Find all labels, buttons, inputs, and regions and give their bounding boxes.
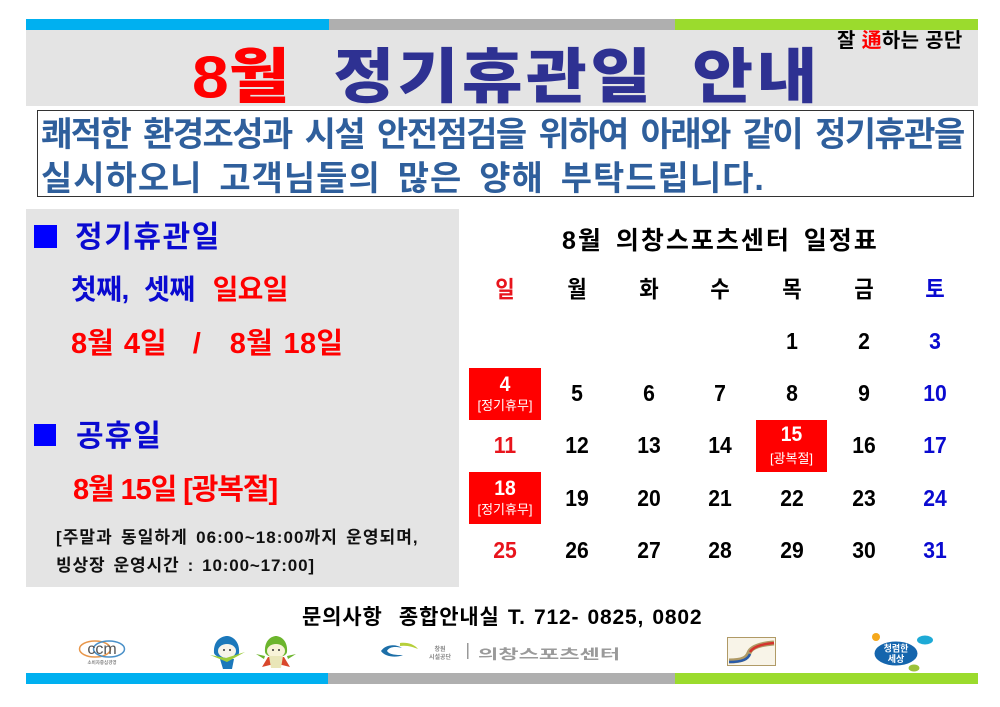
row 4: 21	[708, 485, 732, 511]
weekday header row	[495, 276, 945, 302]
icon: blue mascot	[210, 636, 245, 669]
row 2: 7	[714, 380, 726, 406]
logo: Uichang sports centre	[381, 642, 620, 662]
logo: Uichang sports centre: 창원	[434, 645, 446, 653]
row 4	[565, 485, 947, 511]
row 3: 13	[637, 432, 661, 458]
closure cell 18: [정기휴무]	[477, 502, 533, 517]
row 4: 19	[565, 485, 589, 511]
bullet: public holiday	[34, 424, 56, 446]
row 1: 3	[929, 328, 941, 354]
row 5: 29	[780, 537, 804, 563]
holiday cell 15	[756, 420, 827, 472]
icon: green mascot	[256, 636, 296, 668]
heading: regular closure: 정기휴관일	[75, 221, 221, 254]
row 5: 25	[493, 537, 517, 563]
closure cell 4: [정기휴무]	[477, 398, 533, 413]
holiday hours line 2: 빙상장 운영시간 : 10:00~17:00]	[56, 556, 315, 575]
row 5: 26	[565, 537, 589, 563]
icon: clean city logo: 청렴한	[884, 642, 909, 654]
closure cell 4: 4	[500, 373, 510, 396]
row 3: 17	[923, 432, 947, 458]
title: 8월 정기휴관일 안내	[192, 44, 821, 110]
icon: clean city logo: 세상	[888, 653, 905, 664]
row 2: 5	[571, 380, 583, 406]
closure dates: 8월 4일 / 8월 18일	[71, 328, 343, 360]
notice box	[37, 110, 974, 197]
row 5: 28	[708, 537, 732, 563]
row 4: 20	[637, 485, 661, 511]
holiday date: 8월 15일 [광복절]	[73, 474, 277, 506]
row 2: 6	[643, 380, 655, 406]
row 5: 30	[852, 537, 876, 563]
icon: framed emblem	[727, 637, 776, 666]
weekday header row: 월	[567, 276, 587, 302]
row 4: 24	[923, 485, 947, 511]
holiday cell 15: 15	[781, 423, 802, 446]
weekday header row: 수	[710, 276, 730, 302]
icon: ccm logo	[78, 640, 126, 666]
row 3: 14	[708, 432, 732, 458]
row 3: 16	[852, 432, 876, 458]
title panel	[26, 30, 978, 106]
icon: ccm logo: 소비자중심경영	[88, 659, 116, 666]
notice line 1: 쾌적한 환경조성과 시설 안전점검을 위하여 아래와 같이 정기휴관을	[41, 116, 964, 154]
row 3: 11	[494, 432, 516, 458]
closure cell 18	[469, 472, 541, 524]
row 4: 23	[852, 485, 876, 511]
row 2: 9	[858, 380, 870, 406]
row 3	[494, 432, 947, 458]
row 2: 8	[786, 380, 798, 406]
row 5: 31	[923, 537, 947, 563]
closure weekdays: 첫째, 셋째 일요일	[71, 274, 288, 305]
calendar	[469, 276, 947, 563]
weekday header row: 일	[495, 276, 515, 302]
weekday header row: 금	[854, 276, 874, 302]
weekday header row: 화	[639, 276, 659, 302]
holiday hours line 1: [주말과 동일하게 06:00~18:00까지 운영되며,	[56, 528, 419, 547]
panel: closure info	[26, 209, 459, 587]
calendar heading: 8월 의창스포츠센터 일정표	[562, 227, 879, 255]
logo: Uichang sports centre: 시설공단	[429, 653, 452, 661]
contact line: 문의사항 종합안내실 T. 712- 0825, 0802	[302, 606, 702, 629]
notice line 2: 실시하오니 고객님들의 많은 양해 부탁드립니다.	[41, 160, 765, 198]
row 2: 10	[923, 380, 947, 406]
closure cell 4	[469, 368, 541, 420]
logo: Uichang sports centre: 의창스포츠센터	[478, 646, 620, 662]
row 5	[493, 537, 947, 563]
slogan: 잘 通하는 공단	[837, 30, 963, 52]
icon: clean city logo	[872, 633, 933, 672]
top colour bar	[26, 19, 978, 30]
row 2	[571, 380, 947, 406]
row 5: 27	[637, 537, 661, 563]
closure cell 18: 18	[494, 477, 516, 500]
row 4: 22	[780, 485, 804, 511]
bottom colour bar	[26, 673, 978, 684]
icon: ccm logo: ccm	[87, 641, 117, 658]
row 3: 12	[565, 432, 589, 458]
heading: public holiday: 공휴일	[76, 420, 162, 453]
bullet: regular closure	[34, 225, 57, 248]
row 1: 2	[858, 328, 870, 354]
weekday header row: 토	[925, 276, 945, 302]
row 1	[786, 328, 941, 354]
weekday header row: 목	[782, 276, 802, 302]
holiday cell 15: [광복절]	[770, 451, 813, 466]
row 1: 1	[786, 328, 798, 354]
